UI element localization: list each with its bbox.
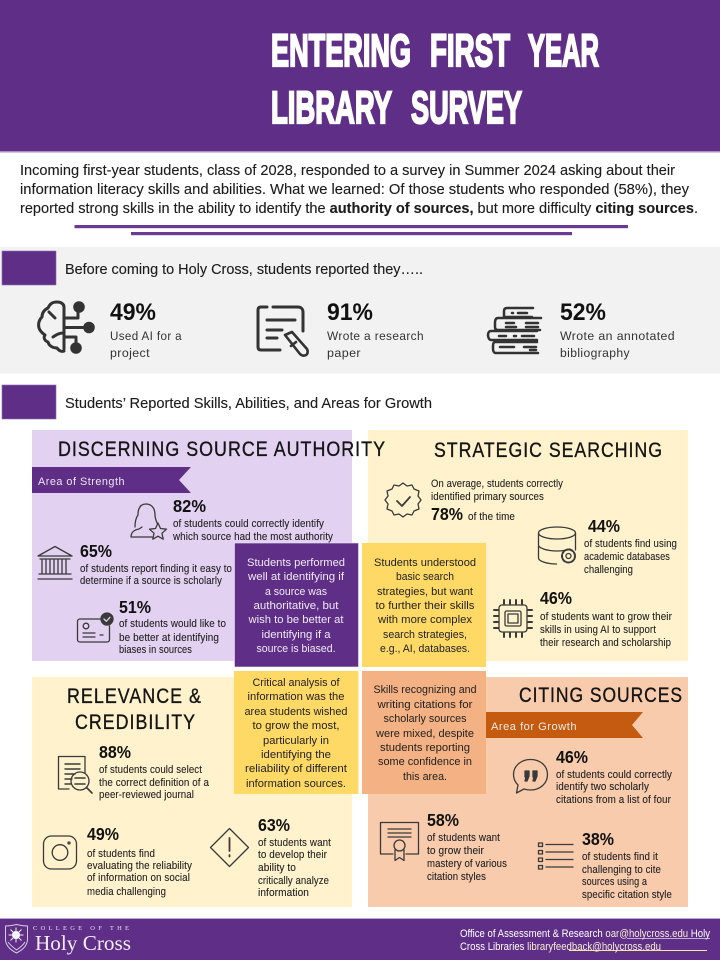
icon: chip [494,600,532,637]
callout: critical analysis: reliability of different [245,763,348,775]
heading: CITING SOURCES [519,683,683,707]
callout: source authority [234,543,358,667]
stat: 65%: determine if a source is scholarly [80,575,222,587]
title: FIRST [430,25,510,76]
icon: verified badge [385,483,421,517]
stat: 49%: 49% [87,824,119,844]
stat: annotated bibliography: bibliography [560,346,630,360]
stat: AI skills: 46% [540,588,572,608]
stat: 46% citations: citations from a list of four [556,794,671,806]
heading: STRATEGIC SEARCHING [434,438,663,462]
footer [0,918,720,960]
stat: research paper [327,299,424,360]
stat: 63%: 63% [258,815,290,835]
panel: before coming to Holy Cross [0,247,720,374]
callout: strategic searching: Students understood [374,557,476,569]
panel: citing sources [368,677,688,907]
stat: used AI: project [110,346,150,360]
stat: AI skills [540,588,672,649]
callout: strategic searching: search strategies, [383,629,467,641]
icon: person with star [131,504,166,539]
callout: source authority: source is biased. [256,643,336,655]
stat: primary sources: of the time [468,511,515,523]
ribbon: area for growth [486,712,643,738]
intro text: information literacy skills and abilities. What we learned: Of those students who responded (58%), they [20,182,690,198]
stat: 63%: information [258,887,309,899]
icon: document with magnifier [58,756,92,793]
callout: strategic searching [362,543,486,667]
callout: source authority: a source was [265,586,327,598]
callout: critical analysis: information sources. [246,778,346,790]
stat: 88%: of students could select [99,764,202,776]
callout: citations [362,671,486,794]
stat: primary sources: 78% [431,504,463,524]
callout: source authority: identifying if a [262,629,331,641]
stat: 63%: critically analyze [258,875,329,887]
stat: annotated bibliography: 52% [560,299,606,326]
logo: wordmark: COLLEGE OF THE [33,925,131,932]
heading: CREDIBILITY [75,710,196,734]
callout: citations: students reporting [380,742,470,754]
callout: citations: writing citations for [376,699,473,711]
stat: research paper: Wrote a research [327,329,424,343]
icon: books [488,308,541,353]
stat: primary sources: identified primary sources [431,491,544,503]
stat: 49%: evaluating the reliability [87,860,192,872]
ribbon: area for growth: Area for Growth [491,721,577,733]
title: SURVEY [411,82,522,133]
stat: 38%: sources using a [582,876,647,888]
section heading: skills: Students’ Reported Skills, Abilities, and Areas for Growth [65,396,432,412]
stat: research paper: 91% [327,299,373,326]
section heading: skills [2,385,432,419]
callout: source authority: well at identifying if [247,571,345,583]
stat: AI skills: their research and scholarship [540,637,671,649]
stat: 49%: of students find [87,848,155,860]
stat: research paper: paper [327,346,361,360]
intro text: Incoming first-year students, class of 2028, responded to a survey in Summer 2024 asking about their [20,163,675,179]
stat: 65%: of students report finding it easy to [80,563,232,575]
title: LIBRARY [271,82,392,133]
icon: social media [44,836,76,869]
stat: annotated bibliography: Wrote an annotated [560,329,675,343]
logo: wordmark: Holy Cross [35,931,131,955]
callout: critical analysis: area students wished [244,706,348,718]
stat: 65% [80,541,232,587]
stat: annotated bibliography [560,299,675,360]
callout: critical analysis: particularly in [263,735,329,747]
stat: 51%: be better at identifying [119,632,219,644]
stat: 58%: mastery of various [427,858,507,870]
title: ENTERING [271,25,411,76]
intro text: reported strong skills in the ability to identify the authority of sources, but more difficulty citing sources. [20,201,698,217]
stat: 82% [172,496,333,543]
ribbon: area of strength: Area of Strength [38,476,125,488]
callout: citations: some confidence in [378,756,472,768]
contact details: Cross Libraries libraryfeedback@holycross.edu [460,941,661,953]
callout: citations: Skills recognizing and [374,684,476,696]
callout: critical analysis: to grow the most, [252,720,340,732]
stat: 46% citations [556,747,672,806]
stat: 51% [119,597,226,656]
callout: citations: were mixed, despite [375,728,474,740]
stat: AI skills: of students want to grow their [540,611,672,623]
callout: critical analysis: Critical analysis of [252,677,340,689]
icon: database with gear [538,527,576,564]
panel: relevance and credibility [32,677,352,907]
title: YEAR [528,25,599,76]
section heading: Before coming to Holy Cross, students reported they….. [65,262,423,278]
contact details: Office of Assessment & Research oar@holycross.edu Holy [460,928,710,940]
stat: 38% [582,829,672,901]
callout: strategic searching: basic search [396,571,454,583]
icon: speech quote [514,760,548,793]
stat: 88%: the correct definition of a [99,777,209,789]
callout: critical analysis: information was the [248,691,344,703]
icon: institution [38,546,72,579]
stat: 46% citations: 46% [556,747,588,767]
stat: 58% [427,810,507,883]
contact details [460,928,710,953]
stat: 51%: of students would like to [119,618,226,630]
header banner [0,0,720,152]
stat: 58%: citation styles [427,871,486,883]
stat: 51%: 51% [119,597,151,617]
callout: source authority: Students performed [247,557,345,569]
stat: 38%: challenging to cite [582,864,661,876]
callout: source authority: wish to be better at [247,614,344,626]
stat: 82%: of students could correctly identify [173,518,324,530]
stat: 82%: which source had the most authority [172,531,333,543]
stat: 46% citations: of students could correctly [556,769,672,781]
icon: AI brain [39,302,93,352]
icon: warning [210,828,248,866]
icon: certificate [380,822,418,860]
stat: primary sources: On average, students correctly [431,478,563,490]
callout: strategic searching: strategies, but want [377,586,474,598]
heading: DISCERNING SOURCE AUTHORITY [58,437,386,461]
stat: databases: 44% [588,516,620,536]
stat: databases: challenging [584,564,633,576]
stat: databases [584,516,677,576]
stat: 38%: 38% [582,829,614,849]
stat: 63%: ability to [258,862,296,874]
panel: strategic searching [368,430,688,661]
callout: source authority: authoritative, but [254,600,339,612]
stat: 46% citations: identify two scholarly [556,781,649,793]
icon: research paper [258,307,308,356]
callout: strategic searching: e.g., AI, databases. [380,643,470,655]
callout: citations: scholarly sources [384,713,467,725]
stat: used AI: 49% [110,299,156,326]
stat: 82%: 82% [173,496,206,516]
stat: 38%: specific citation style [582,889,672,901]
panel: discerning source authority [32,430,386,661]
callout: strategic searching: with more complex [377,614,472,626]
stat: used AI [110,299,182,360]
stat: 63%: of students want [258,837,331,849]
stat: 58%: of students want [427,832,500,844]
stat: 65%: 65% [80,541,112,561]
logo: shield [6,924,28,953]
icon: id card with check [78,613,113,642]
stat: 49%: media challenging [87,886,166,898]
stat: AI skills: skills in using AI to support [540,624,656,636]
stat: databases: academic databases [584,551,670,563]
stat: 51%: biases in sources [119,644,192,656]
icon: list [538,843,573,869]
double rule [74,225,628,235]
heading [67,684,202,734]
callout: strategic searching: to further their skills [376,600,475,612]
callout: citations: this area. [403,771,447,783]
stat: 58%: to grow their [427,845,484,857]
callout: critical analysis [234,671,358,794]
ribbon: area of strength [32,467,191,493]
stat: 58%: 58% [427,810,459,830]
heading: RELEVANCE & [67,684,202,708]
stat: databases: of students find using [584,538,677,550]
stat: 63% [258,815,331,899]
stat: 49% [87,824,192,898]
stat: 49%: of information on social [87,872,190,884]
stat: used AI: Used AI for a [110,329,182,343]
title [271,25,599,133]
stat: 88%: peer-reviewed journal [99,789,194,801]
stat: 88% [99,742,209,801]
section marker [2,251,56,285]
stat: 38%: of students find it [582,851,658,863]
intro text [20,163,698,217]
stat: 88%: 88% [99,742,131,762]
stat: 63%: to develop their [258,849,327,861]
stat: primary sources [431,478,563,524]
callout: critical analysis: identifying the [261,749,331,761]
